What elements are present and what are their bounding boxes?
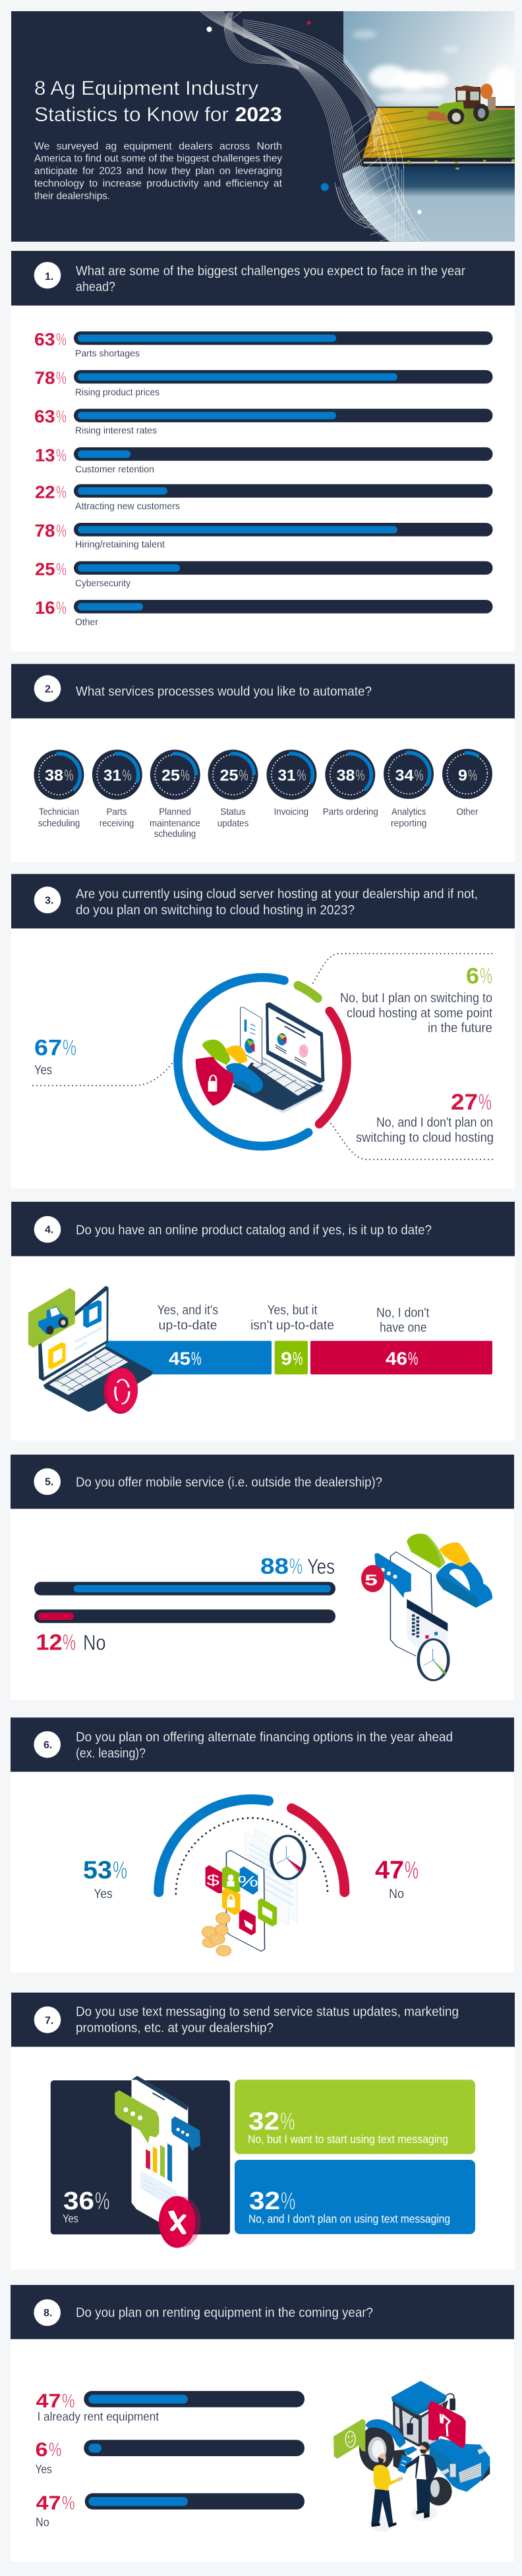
donut: technician scheduling: 38 (45, 767, 63, 785)
card: 32% want to start (235, 2080, 475, 2154)
donut: technician scheduling: % (65, 767, 74, 785)
dotted connectors (33, 953, 492, 1160)
stat: 47% no: % (405, 1856, 419, 1884)
stat: 88% yes (260, 1554, 335, 1579)
question 5 header: Do you offer mobile service (i.e. outside the dealership)? (76, 1474, 382, 1489)
bar: no: % (62, 2492, 75, 2514)
icon: phone with chat bubbles and wrench (115, 2076, 201, 2248)
stat: 67% yes (34, 1036, 76, 1078)
stat: 27% no plan: switching to cloud hosting (356, 1131, 494, 1145)
bar: yes: 6 (36, 2439, 47, 2461)
title (34, 76, 282, 126)
donut: planned maintenance scheduling: Planned (159, 807, 191, 818)
bar: attracting new customers: Attracting new customers (75, 502, 180, 512)
question 2 header: What services processes would you like to automate? (76, 684, 372, 699)
donut: analytics reporting (384, 749, 434, 829)
donut: parts ordering: Parts ordering (323, 807, 378, 818)
stat: 47% no: 47 (375, 1856, 404, 1884)
bar: rising product prices (34, 368, 493, 398)
donut: technician scheduling: Technician (39, 807, 79, 818)
card: 32% want to start: % (280, 2108, 295, 2135)
donut: parts ordering: 38 (336, 767, 355, 785)
bar: rising product prices: 78 (34, 368, 55, 388)
bar: hiring/retaining talent: % (56, 521, 67, 541)
question 7 header: 7. (45, 2016, 53, 2027)
bar: customer retention (35, 445, 493, 475)
stat: 67% yes: Yes (34, 1063, 52, 1078)
bar: parts shortages (34, 329, 493, 360)
stat: 6% plan to switch (340, 963, 492, 1035)
question 8 header (11, 2285, 514, 2339)
icon: phone with clouds, calendar and clock (361, 1534, 492, 1680)
title: 2023 (235, 103, 282, 126)
donut: parts ordering (323, 749, 378, 818)
question 2 header: 2. (45, 684, 53, 695)
title: Statistics to Know for (34, 103, 229, 126)
stacked bar: catalog status: % (293, 1348, 303, 1368)
labels: catalog status: Yes, and it's (157, 1303, 218, 1318)
donut: planned maintenance scheduling (150, 749, 200, 840)
question 6 header: (ex. leasing)? (76, 1746, 146, 1761)
question 6 header: 6. (44, 1740, 52, 1751)
decorative dots (207, 21, 422, 214)
donut: invoicing: Invoicing (274, 807, 308, 818)
icon: phone with finance tiles and coins: % (238, 1873, 258, 1890)
bar: cybersecurity (35, 559, 493, 589)
bar: hiring/retaining talent: Hiring/retaining talent (75, 540, 165, 550)
donut: other: 9 (458, 767, 467, 785)
bar: attracting new customers: % (56, 482, 67, 502)
hero photo: tractor in field on phone (342, 11, 519, 242)
icon: laptop with catalog (28, 1286, 153, 1414)
stacked bar: catalog status: % (191, 1348, 202, 1368)
stat: 47% no (375, 1856, 419, 1902)
donut: invoicing (266, 749, 316, 818)
stat: 88% yes: 88 (260, 1554, 289, 1579)
bar: cybersecurity: Cybersecurity (75, 579, 131, 589)
donut: parts receiving: Parts (107, 807, 127, 818)
donut: parts receiving: 31 (103, 767, 121, 785)
stat: 53% yes (83, 1856, 127, 1902)
panel: question 4 (11, 1202, 515, 1441)
bar: hiring/retaining talent: 78 (34, 521, 55, 541)
icon: phone with finance tiles and coins (202, 1829, 304, 1956)
intro paragraph: America to find out some of the biggest challenges they (34, 153, 282, 165)
labels: catalog status (157, 1303, 430, 1335)
intro paragraph: anticipate for 2023 and how they plan on leveraging (34, 166, 282, 177)
question 4 header: Do you have an online product catalog and if yes, is it up to date? (76, 1222, 432, 1237)
card: 32% no plan: 32 (249, 2187, 280, 2215)
stat: 12% no: No (83, 1630, 106, 1654)
icon: phone with finance tiles and coins: $ (206, 1872, 219, 1889)
stat: 27% no plan (356, 1090, 494, 1145)
bar: other (35, 598, 493, 628)
bar: rising interest rates (34, 407, 493, 437)
card: 32% want to start: No, but I want to start using text messaging (248, 2133, 448, 2146)
labels: catalog status: have one (380, 1321, 427, 1335)
stat: 6% plan to switch: % (480, 963, 492, 988)
question 1 header: What are some of the biggest challenges you expect to face in the year (76, 263, 465, 279)
stat: 12% no: 12 (36, 1630, 62, 1655)
bar: hiring/retaining talent (34, 521, 493, 550)
bar: parts shortages: 63 (34, 329, 55, 349)
ring chart: cloud hosting (178, 978, 347, 1146)
bar: attracting new customers (35, 482, 493, 512)
stat: 6% plan to switch: cloud hosting at some point (347, 1006, 492, 1021)
gauge chart: financing (159, 1800, 345, 1894)
card: 36% yes: Yes (63, 2212, 78, 2225)
stat: 6% plan to switch: 6 (466, 963, 479, 988)
labels: catalog status: No, I don't (376, 1306, 430, 1320)
stacked bar: catalog status: 46 (386, 1348, 407, 1368)
donut: analytics reporting: reporting (391, 818, 426, 829)
card: 32% no plan: % (281, 2187, 295, 2215)
donut: technician scheduling (34, 749, 84, 829)
bar: parts shortages: Parts shortages (75, 349, 140, 360)
bar: rising interest rates: 63 (34, 407, 55, 427)
donut: other: % (468, 767, 477, 785)
stat: 53% yes: 53 (83, 1856, 112, 1884)
bar: customer retention: 13 (35, 445, 55, 465)
stat: 6% plan to switch: in the future (428, 1021, 492, 1035)
stat: 67% yes: % (63, 1036, 76, 1061)
donut: planned maintenance scheduling: maintenance (150, 818, 200, 829)
bar: already rent (36, 2390, 304, 2423)
donut: status updates: 25 (220, 767, 239, 785)
question 4 header (11, 1202, 515, 1256)
bar: yes: Yes (36, 2462, 52, 2476)
stat: 47% no: No (389, 1887, 404, 1902)
bar: other: % (56, 598, 67, 618)
labels: catalog status: Yes, but it (268, 1303, 318, 1318)
bar: attracting new customers: 22 (35, 482, 55, 502)
donut: invoicing: % (297, 767, 306, 785)
card: 32% want to start: 32 (248, 2108, 279, 2135)
donut: status updates: updates (218, 818, 248, 829)
donut: parts receiving (92, 749, 142, 829)
intro paragraph: technology to increase productivity and efficiency at (34, 178, 283, 190)
card: 36% yes (51, 2076, 230, 2248)
stacked bar: catalog status: 9 (281, 1348, 292, 1368)
bar: other: Other (75, 618, 98, 628)
donut: parts receiving: receiving (100, 818, 134, 829)
bar: cybersecurity: % (56, 559, 67, 579)
bar: parts shortages: % (56, 329, 67, 349)
panel: question 2 (11, 664, 515, 862)
donut: parts receiving: % (123, 767, 132, 785)
bar: already rent: % (62, 2390, 75, 2412)
donut: other (442, 749, 492, 818)
icon: laptop with cloud and shield (196, 1002, 324, 1114)
question 1 header: ahead? (76, 279, 115, 294)
card: 32% no plan: No, and I don't plan on using text messaging (248, 2213, 450, 2226)
stacked bar: catalog status (105, 1341, 492, 1374)
question 8 header: Do you plan on renting equipment in the coming year? (76, 2305, 373, 2320)
bar: customer retention: % (56, 445, 67, 465)
question 8 header: 8. (44, 2308, 52, 2319)
bar: other: 16 (35, 598, 55, 618)
intro paragraph (34, 141, 283, 202)
bar: no: 47 (36, 2492, 61, 2514)
bar: rising product prices: % (56, 368, 67, 388)
donut: parts ordering: % (356, 767, 365, 785)
title: 8 Ag Equipment Industry (34, 76, 258, 99)
bar: rising product prices: Rising product prices (75, 388, 160, 398)
intro paragraph: their dealerships. (34, 191, 110, 202)
question 7 header: promotions, etc. at your dealership? (76, 2020, 274, 2035)
stat: 53% yes: % (113, 1856, 127, 1884)
stat: 88% yes: Yes (307, 1555, 335, 1578)
question 7 header: Do you use text messaging to send service status updates, marketing (76, 2004, 459, 2020)
donut: status updates: Status (220, 807, 246, 818)
bar: already rent: 47 (36, 2390, 61, 2412)
donut: analytics reporting: % (414, 767, 423, 785)
icon: tractor with two people (334, 2381, 490, 2532)
question 4 header: 4. (45, 1224, 53, 1235)
panel: question 7 (11, 1993, 515, 2270)
question 5 header (11, 1455, 514, 1509)
panel: question 1 (11, 251, 515, 651)
stacked bar: catalog status: 45 (169, 1348, 190, 1368)
question 5 header: 5. (45, 1477, 53, 1488)
donut: invoicing: 31 (278, 767, 295, 785)
panel: question 5 (11, 1455, 514, 1700)
question 6 header (11, 1717, 514, 1772)
wave line ribbon (200, 11, 430, 241)
donut: analytics reporting: Analytics (392, 807, 426, 818)
panel: hero (11, 11, 519, 242)
donut: planned maintenance scheduling: 25 (161, 767, 180, 785)
bar: no: No (36, 2515, 49, 2529)
stat: 12% no (36, 1630, 106, 1655)
card: 36% yes: % (95, 2187, 109, 2215)
bar: rising interest rates: % (56, 407, 67, 427)
question 6 header: Do you plan on offering alternate financing options in the year ahead (76, 1730, 453, 1745)
stat: 6% plan to switch: No, but I plan on switching to (340, 991, 492, 1006)
panel: question 8 (11, 2285, 514, 2562)
donut: status updates: % (239, 767, 248, 785)
panel: question 3 (11, 874, 515, 1189)
donut: planned maintenance scheduling: % (181, 767, 190, 785)
donut: analytics reporting: 34 (395, 767, 414, 785)
card: 32% no plan (235, 2160, 475, 2234)
labels: catalog status: up-to-date (158, 1318, 218, 1333)
bar: no (36, 2492, 304, 2529)
panel: question 6 (11, 1717, 514, 1973)
donut: planned maintenance scheduling: scheduling (154, 829, 196, 840)
question 2 header (11, 664, 515, 718)
icon: phone with clouds, calendar and clock: 5 (364, 1572, 378, 1589)
intro paragraph: We surveyed ag equipment dealers across North (34, 141, 282, 152)
question 1 header: 1. (45, 271, 53, 282)
donut: status updates (208, 749, 258, 829)
stat: 67% yes: 67 (34, 1036, 62, 1061)
donut: technician scheduling: scheduling (38, 818, 80, 829)
stat: 27% no plan: 27 (451, 1090, 478, 1115)
question 3 header: do you plan on switching to cloud hosting in 2023? (76, 902, 355, 917)
card: 36% yes: 36 (63, 2187, 94, 2215)
bars: mobile service (34, 1582, 335, 1623)
bar: yes (36, 2439, 304, 2476)
donut: other: Other (456, 807, 478, 818)
bar: cybersecurity: 25 (35, 559, 55, 579)
bar: customer retention: Customer retention (75, 465, 154, 475)
bar: rising interest rates: Rising interest rates (75, 426, 157, 437)
stacked bar: catalog status: % (408, 1348, 418, 1368)
stat: 12% no: % (63, 1630, 76, 1655)
tractor (426, 84, 515, 124)
stat: 88% yes: % (289, 1554, 303, 1579)
question 7 header (11, 1993, 515, 2047)
stat: 27% no plan: % (478, 1090, 492, 1115)
question 3 header: 3. (45, 896, 53, 907)
question 3 header: Are you currently using cloud server hosting at your dealership and if not, (76, 886, 478, 901)
question 3 header (11, 874, 515, 928)
labels: catalog status: isn't up-to-date (250, 1318, 334, 1333)
bar: yes: % (49, 2439, 61, 2461)
bar: already rent: I already rent equipment (37, 2409, 159, 2423)
question 1 header (11, 251, 515, 306)
stat: 27% no plan: No, and I don't plan on (376, 1115, 493, 1130)
stat: 53% yes: Yes (94, 1887, 113, 1902)
